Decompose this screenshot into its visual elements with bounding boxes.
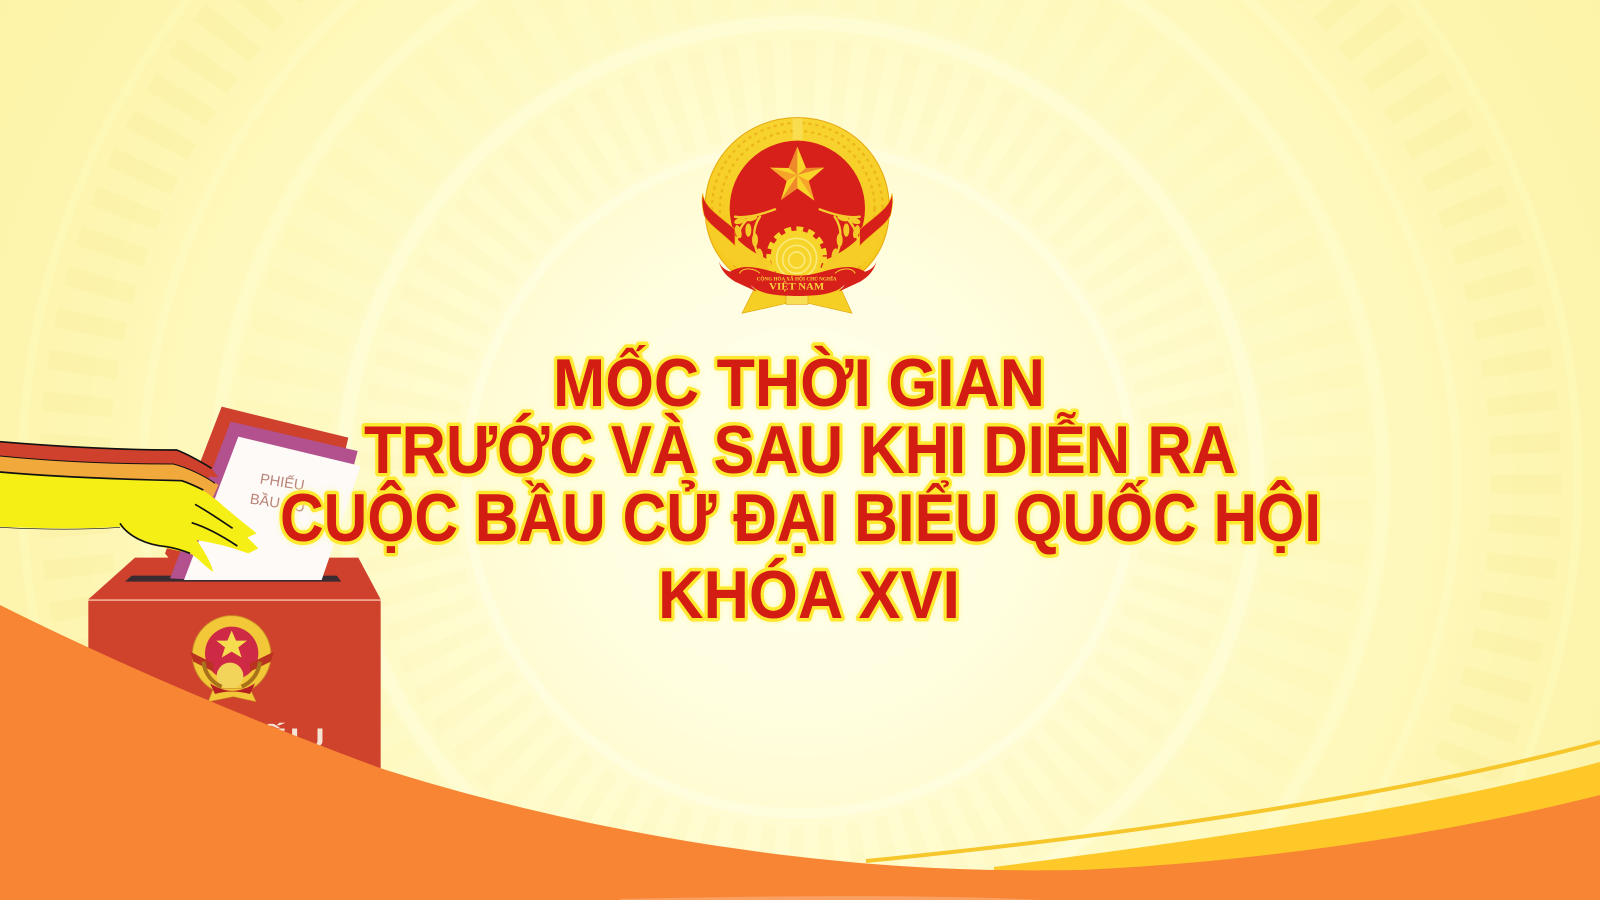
bottom wave: thick yellow band bbox=[994, 762, 1600, 880]
emblem lower wheat bbox=[707, 223, 888, 277]
bottom wave: lower highlight bbox=[620, 896, 1040, 900]
box lid highlight bbox=[88, 599, 381, 601]
emblem banner text bbox=[757, 274, 837, 293]
emblem side ribbons bbox=[702, 193, 893, 246]
emblem rice sprig right bbox=[820, 209, 861, 265]
emblem gear bbox=[769, 229, 824, 284]
red sleeve stripe bbox=[0, 442, 218, 477]
title line 1: MỐC THỜI GIAN bbox=[553, 344, 1045, 421]
background pattern: outer drum teeth bbox=[80, 0, 1522, 798]
ballot: red sheet bbox=[165, 407, 348, 580]
emblem banner text: CỘNG HÒA XÃ HỘI CHỦ NGHĨA bbox=[757, 274, 837, 282]
title bbox=[280, 344, 1321, 633]
ballot text: BẦU CỬ bbox=[249, 490, 308, 516]
ballot text: PHIẾU bbox=[259, 470, 306, 494]
hand outlines bbox=[0, 442, 237, 553]
emblem rice sprig left bbox=[733, 209, 775, 265]
ballot: white sheet bbox=[184, 437, 361, 580]
bottom wave: thin yellow stripe bbox=[866, 742, 1600, 861]
box label: PHIẾU bbox=[163, 721, 327, 755]
box emblem bbox=[190, 616, 274, 702]
icon: national emblem bbox=[702, 118, 893, 313]
ballot: purple sheet bbox=[170, 422, 358, 580]
ballot slot bbox=[125, 576, 341, 582]
emblem banner bbox=[719, 261, 877, 296]
emblem base bbox=[742, 287, 852, 313]
emblem wheat wreath bbox=[705, 118, 889, 294]
emblem star bbox=[770, 147, 824, 201]
yellow hand bbox=[0, 472, 258, 572]
orange sleeve stripe bbox=[0, 456, 218, 497]
title line 3: CUỘC BẦU CỬ ĐẠI BIỂU QUỐC HỘI bbox=[280, 479, 1321, 556]
bottom wave: orange bbox=[0, 605, 1600, 900]
emblem red field bbox=[730, 141, 865, 276]
icon: voting hand bbox=[0, 442, 258, 572]
ballot box lid bbox=[88, 558, 381, 599]
emblem banner text: VIỆT NAM bbox=[769, 280, 824, 293]
title line 4: KHÓA XVI bbox=[658, 557, 960, 633]
ballot text bbox=[249, 470, 308, 516]
ballot box body bbox=[88, 601, 381, 790]
title line 2: TRƯỚC VÀ SAU KHI DIỄN RA bbox=[364, 411, 1236, 488]
ballot box illustration bbox=[0, 407, 381, 790]
